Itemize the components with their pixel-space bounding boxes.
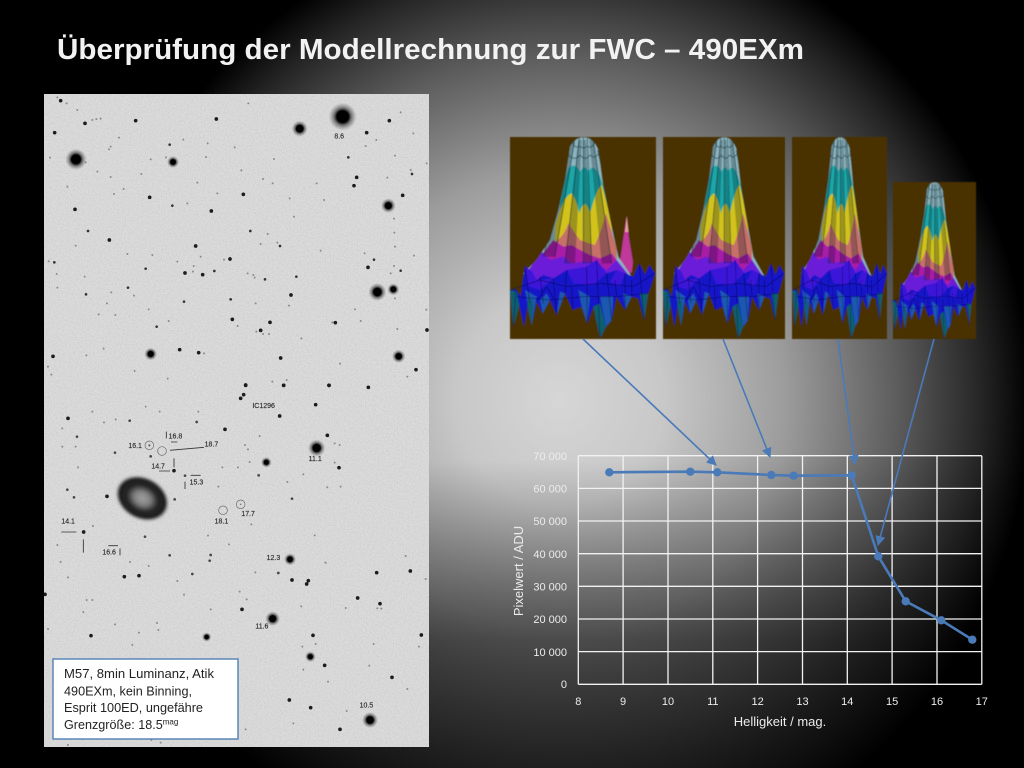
magnitude annotations (61, 134, 373, 710)
caption box (53, 659, 238, 739)
magnitude annotations: 8.6 (334, 134, 344, 141)
magnitude annotations: 14.1 (61, 518, 75, 525)
chart grid (578, 456, 982, 684)
M57 ring nebula (115, 474, 170, 522)
magnitude annotations: 16.6 (102, 549, 116, 556)
y axis tick labels: 0 (561, 679, 567, 691)
x axis tick labels: 16 (931, 696, 943, 708)
magnitude annotations: IC1296 (252, 403, 275, 410)
y axis tick labels: 10 000 (533, 647, 567, 659)
title: Überprüfung der Modellrechnung zur FWC – 490EXm (57, 33, 804, 66)
y axis tick labels: 30 000 (533, 582, 567, 594)
star profile plot 2 (663, 130, 785, 339)
caption box: 490EXm, kein Binning, (64, 684, 192, 698)
y axis tick labels (533, 451, 567, 691)
arrows from star profiles to data points (583, 339, 934, 545)
star field photograph of M57 (44, 94, 429, 747)
x axis tick labels: 15 (886, 696, 898, 708)
y axis title: Pixelwert / ADU (511, 526, 526, 616)
x axis tick labels: 11 (707, 696, 719, 708)
caption box: mag (163, 718, 178, 726)
magnitude annotations: 18.7 (205, 442, 218, 449)
y axis tick labels: 70 000 (533, 451, 567, 463)
star profile plot 4 (893, 176, 976, 339)
star profile plot 3 (792, 130, 887, 339)
magnitude annotations: 18.1 (215, 518, 228, 525)
x axis tick labels: 12 (751, 696, 764, 708)
y axis tick labels: 50 000 (533, 516, 567, 528)
x axis tick labels: 13 (796, 696, 809, 708)
x axis tick labels: 9 (620, 696, 626, 708)
caption box: Grenzgröße: 18.5 (64, 718, 163, 732)
y axis tick labels: 40 000 (533, 549, 567, 561)
x axis tick labels (575, 696, 988, 708)
magnitude annotations: 16.1 (128, 443, 142, 450)
x axis tick labels: 14 (841, 696, 853, 708)
x axis tick labels: 10 (662, 696, 674, 708)
magnitude annotations: 17.7 (241, 511, 255, 518)
magnitude annotations: 14.7 (151, 463, 165, 470)
magnitude annotations: 11.1 (309, 456, 322, 463)
caption box: Esprit 100ED, ungefähre (64, 701, 203, 715)
y axis tick labels: 60 000 (533, 484, 567, 496)
magnitude annotations: 15.3 (190, 479, 203, 486)
chart: Pixelwert vs Helligkeit (511, 451, 988, 729)
x axis tick labels: 8 (575, 696, 581, 708)
caption box: M57, 8min Luminanz, Atik (64, 667, 215, 681)
x axis title: Helligkeit / mag. (734, 714, 826, 729)
data series (605, 468, 976, 644)
magnitude annotations: 16.8 (169, 433, 182, 440)
magnitude annotations: 11.6 (255, 624, 269, 631)
magnitude annotations: 10.5 (360, 703, 373, 710)
star profile plot 1 (510, 130, 656, 339)
magnitude annotations: 12.3 (267, 555, 280, 562)
x axis tick labels: 17 (976, 696, 988, 708)
y axis tick labels: 20 000 (533, 614, 567, 626)
